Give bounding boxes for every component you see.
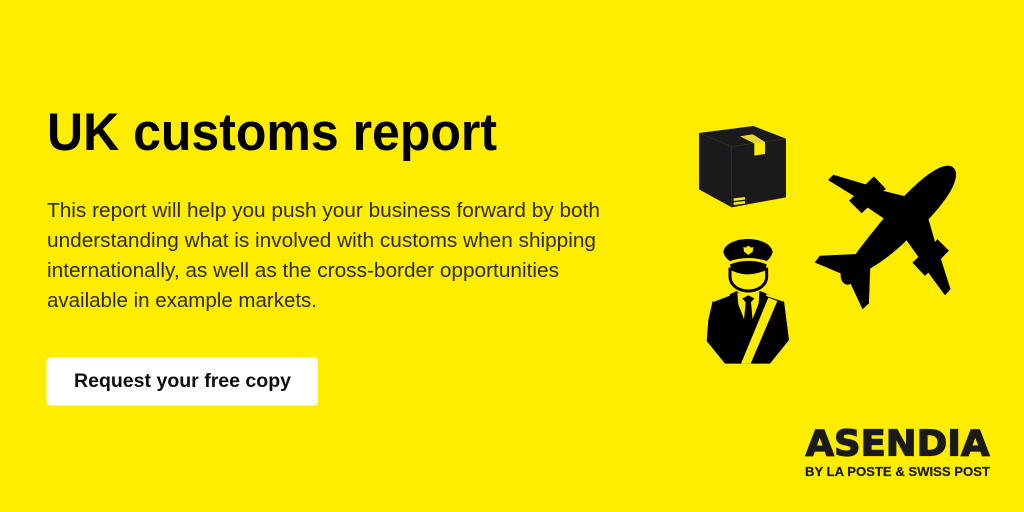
body text block: This report will help you push your business forward by both bbox=[47, 200, 600, 222]
button: request your free copy bbox=[46, 358, 318, 406]
icon: customs officer bbox=[707, 239, 789, 364]
body text block: internationally, as well as the cross-border opportunities bbox=[47, 260, 559, 282]
body text block: available in example markets. bbox=[47, 290, 317, 312]
officer face bbox=[730, 268, 767, 291]
body text block: understanding what is involved with customs when shipping bbox=[47, 230, 596, 252]
title: UK customs report bbox=[47, 103, 497, 162]
body text block bbox=[47, 200, 600, 312]
icon: airplane bbox=[815, 166, 956, 309]
logo: Asendia: BY LA POSTE & SWISS POST bbox=[805, 465, 990, 479]
logo: Asendia: ASENDIA bbox=[806, 424, 990, 464]
icon: cardboard box bbox=[699, 126, 786, 207]
button: request your free copy: Request your free copy bbox=[74, 371, 291, 392]
officer cap bbox=[723, 239, 773, 274]
officer uniform bbox=[707, 291, 789, 364]
